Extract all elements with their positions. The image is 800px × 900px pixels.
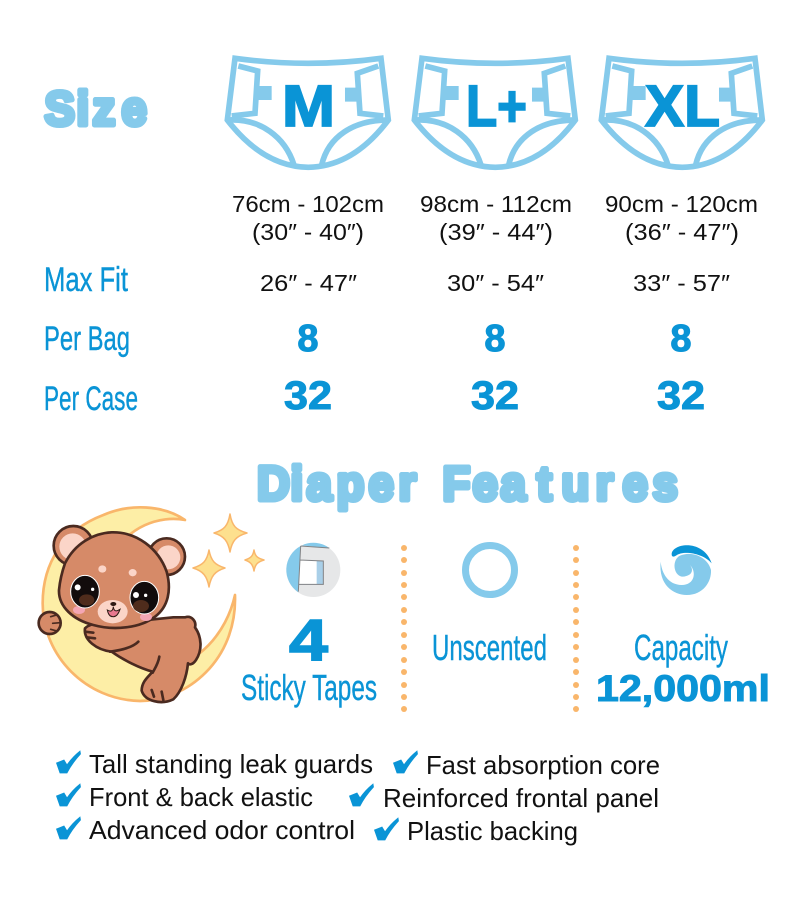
icon: tape — [286, 543, 340, 597]
check icon 2 — [394, 751, 418, 773]
number 4: 4 — [289, 608, 328, 673]
icon: wave — [660, 545, 712, 595]
column: size L+ — [414, 58, 575, 418]
check icon 4 — [350, 784, 374, 806]
feature checklist — [56, 749, 660, 846]
check icon 1 — [56, 751, 80, 773]
bear ears — [54, 526, 185, 575]
label unscented: Unscented — [432, 627, 547, 668]
icon: sparkle large — [214, 514, 247, 552]
per case M: 32 — [284, 374, 332, 418]
per case L+: 32 — [471, 374, 519, 418]
max fit M: 26″ - 47″ — [260, 270, 357, 296]
bear body — [85, 617, 201, 702]
icon: diaper L+ — [414, 58, 575, 167]
size letter XL: XL — [645, 74, 720, 139]
label capacity: Capacity — [634, 627, 728, 668]
column: size M — [227, 58, 388, 418]
feature: capacity — [596, 545, 770, 709]
per bag M: 8 — [297, 318, 319, 360]
check icon 6 — [374, 818, 398, 840]
per case XL: 32 — [657, 374, 705, 418]
feature: sticky tapes — [241, 543, 377, 708]
row label: per bag: Per Bag — [44, 320, 130, 358]
icon: sparkle medium — [193, 550, 225, 587]
label sticky tapes: Sticky Tapes — [241, 667, 377, 708]
check icon 3 — [56, 784, 80, 806]
waist range XL: 90cm - 120cm — [605, 191, 758, 217]
check icon 5 — [56, 817, 80, 839]
feature: unscented — [432, 546, 547, 668]
waist range M — [232, 191, 384, 245]
waist range M: 76cm - 102cm — [232, 191, 384, 217]
per bag XL: 8 — [670, 318, 692, 360]
column: size XL — [601, 58, 762, 418]
bear arm and toes — [85, 632, 163, 700]
bear head — [59, 532, 169, 628]
per bag L+: 8 — [484, 318, 506, 360]
heading: diaper features: Diaper Features — [257, 457, 678, 510]
bear paw — [39, 612, 61, 634]
icon: diaper XL — [601, 58, 762, 167]
item plastic backing: Plastic backing — [407, 816, 578, 846]
divider dots right — [573, 545, 579, 712]
heading: size: Size — [44, 82, 147, 135]
max fit L+: 30″ - 54″ — [447, 270, 544, 296]
waist range M: (30″ - 40″) — [252, 219, 364, 245]
waist range L+ — [420, 191, 572, 245]
illustration: bear on moon — [39, 507, 235, 702]
bear face — [71, 565, 159, 623]
item front and back elastic: Front & back elastic — [89, 782, 313, 812]
divider dots left — [401, 545, 407, 712]
waist range XL: (36″ - 47″) — [625, 219, 739, 245]
value 12,000ml: 12,000ml — [596, 668, 770, 709]
size letter L+: L+ — [466, 74, 527, 139]
item fast absorption core: Fast absorption core — [426, 750, 660, 780]
waist range XL — [605, 191, 758, 245]
icon: sparkle small — [245, 550, 264, 571]
item reinforced frontal panel: Reinforced frontal panel — [383, 783, 659, 813]
row label: max fit: Max Fit — [44, 261, 128, 299]
icon: diaper M — [227, 58, 388, 167]
size letter M: M — [282, 74, 335, 139]
row label: per case: Per Case — [44, 380, 138, 418]
icon: ring — [466, 546, 514, 594]
item tall standing leak guards: Tall standing leak guards — [89, 749, 373, 779]
waist range L+: (39″ - 44″) — [439, 219, 553, 245]
waist range L+: 98cm - 112cm — [420, 191, 572, 217]
item advanced odor control: Advanced odor control — [89, 815, 355, 845]
moon — [43, 507, 235, 701]
max fit XL: 33″ - 57″ — [633, 270, 730, 296]
